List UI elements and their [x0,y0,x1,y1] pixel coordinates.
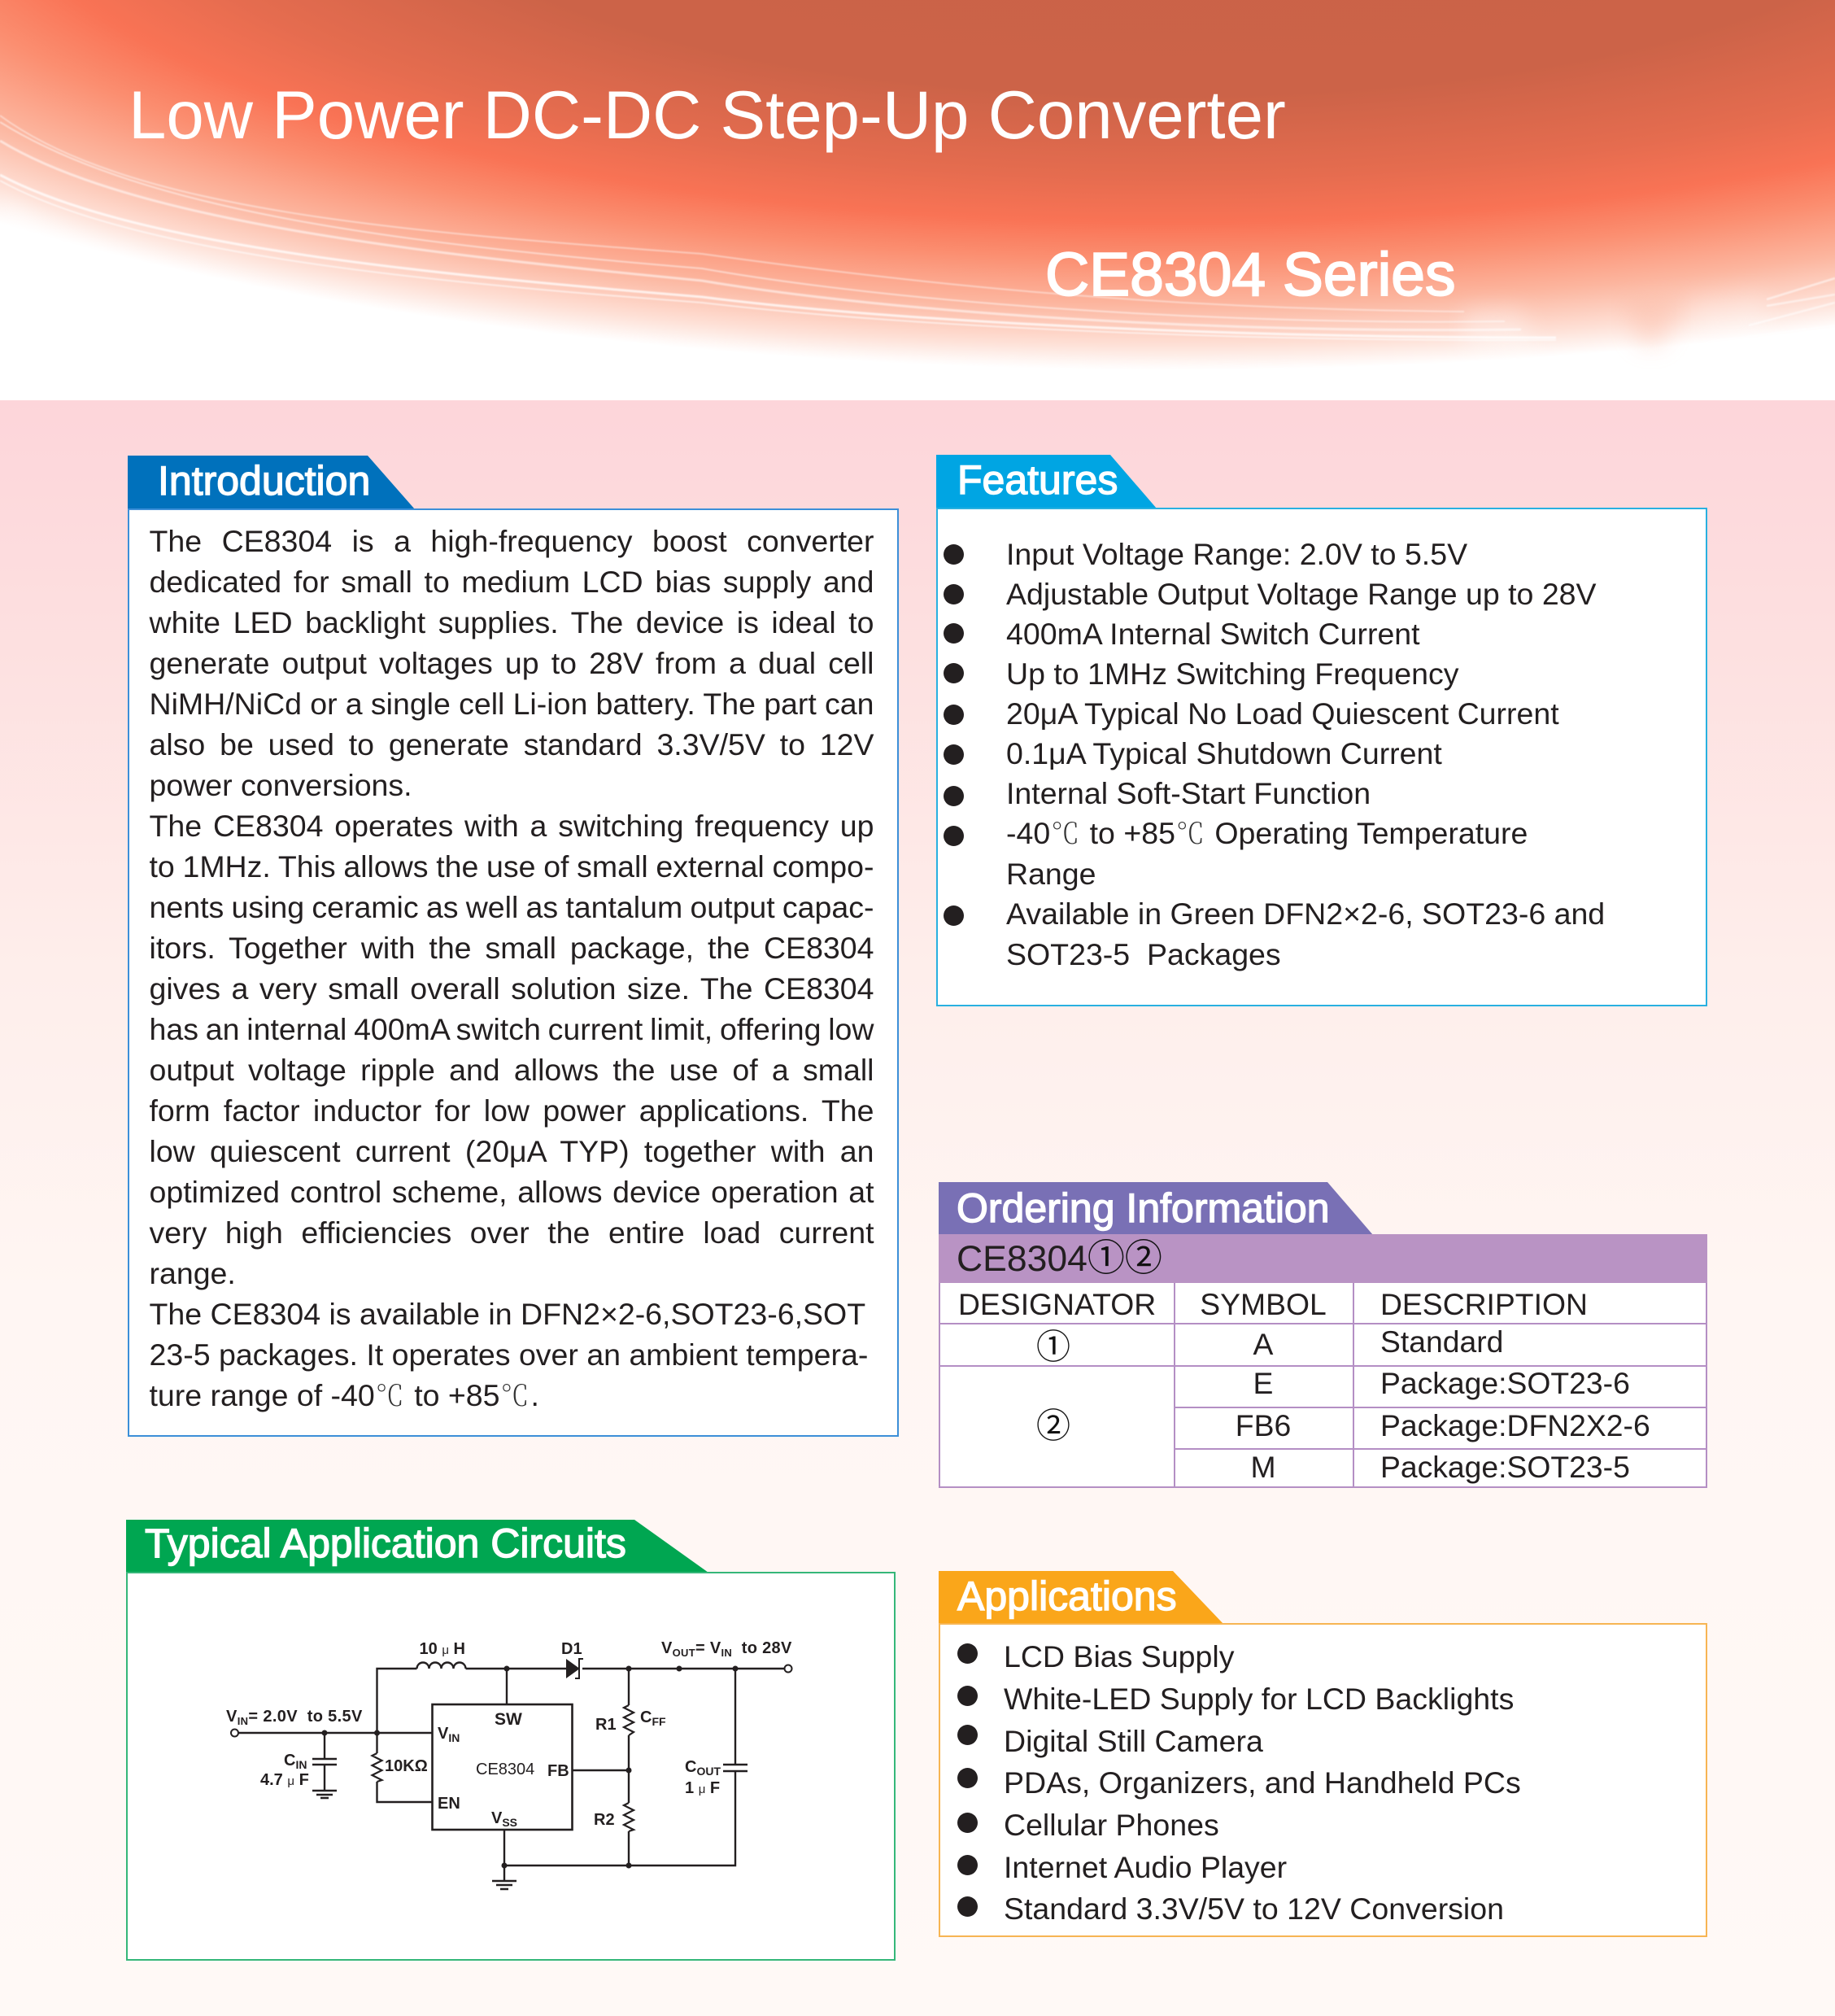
paragraph 2: low quiescent current (20μA TYP) together with an [150,1134,874,1168]
paragraph 2: The CE8304 operates with a switching frequency up [150,809,874,843]
circuit labels: FB [547,1762,569,1780]
circuit labels: V [438,1725,448,1743]
symbol E: E [1253,1366,1273,1400]
description SOT23-6: Package:SOT23-6 [1380,1366,1630,1400]
IC block [433,1704,573,1830]
circuit labels [226,1639,792,1829]
paragraph 3: The CE8304 is available in DFN2×2-6,SOT23-6,SOT [150,1297,865,1331]
circuit labels: R2 [594,1811,615,1829]
application 1: LCD Bias Supply [1004,1639,1234,1673]
panel: applications [939,1571,1707,1937]
panel: ordering information [939,1182,1707,1488]
terminals and junctions [231,1665,792,1868]
panel: typical application circuits [126,1520,896,1961]
description DFN2X2-6: Package:DFN2X2-6 [1380,1408,1650,1442]
application 3: Digital Still Camera [1004,1724,1263,1758]
paragraph 1: power conversions. [150,768,412,802]
paragraph 1: The CE8304 is a high-frequency boost converter [150,524,874,558]
paragraph 3 [150,1297,868,1414]
circuit labels: CE8304 [476,1761,534,1778]
paragraph 1: also be used to generate standard 3.3V/5V to 12V [150,727,874,761]
circuit labels: C [685,1758,696,1776]
paragraph 2: very high efficiencies over the entire load current [150,1215,874,1250]
paragraph 2: to 1MHz. This allows the use of small external compo- [150,849,874,884]
ordering heading tab [939,1182,1373,1235]
circuits heading tab [126,1520,708,1573]
feature 9 [944,897,1605,971]
description standard: Standard [1380,1324,1503,1359]
feature 8: -40℃ to +85℃ Operating Temperature [1006,812,1528,853]
paragraph 1: dedicated for small to medium LCD bias supply and [150,565,874,599]
circuit labels: IN [448,1731,460,1744]
circuit labels: D1 [561,1640,582,1658]
resistors [373,1705,634,1831]
subtitle: series name: CE8304 Series [1045,240,1455,308]
feature 8: Range [1006,856,1096,890]
application 4: PDAs, Organizers, and Handheld PCs [1004,1765,1521,1800]
paragraph 2: output voltage ripple and allows the use of a small [150,1053,874,1087]
feature 3: 400mA Internal Switch Current [1006,617,1420,651]
designator 1: ① [1036,1320,1070,1369]
circuit labels: V [491,1809,502,1827]
paragraph 1: white LED backlight supplies. The device is ideal to [150,605,874,639]
paragraph 2: gives a very small overall solution size. The CE8304 [150,971,874,1006]
circuits heading: Typical Application Circuits [145,1521,626,1566]
ordering heading: Ordering Information [957,1185,1330,1231]
circuit labels: IN [721,1647,732,1659]
circuit labels: C [284,1752,295,1769]
header banner background [0,0,1835,364]
circuit labels: = 2.0V to 5.5V [248,1708,363,1726]
paragraph 3: ture range of -40℃ to +85℃. [150,1373,539,1414]
part number strip: CE8304①② [957,1228,1162,1282]
feature 8 [944,812,1528,890]
column header: designator: DESIGNATOR [958,1287,1156,1321]
inductor [416,1663,465,1669]
introduction heading: Introduction [158,458,370,504]
wires [238,1669,784,1881]
circuit labels: C [640,1708,652,1726]
paragraph 3: 23-5 packages. It operates over an ambient tempera- [150,1337,868,1372]
paragraph 2: has an internal 400mA switch current limit, offering low [150,1012,874,1046]
description SOT23-5: Package:SOT23-5 [1380,1450,1630,1484]
application 7: Standard 3.3V/5V to 12V Conversion [1004,1892,1504,1926]
circuit labels: IN [295,1758,307,1771]
circuit diagram [226,1639,792,1891]
circuit labels: 10KΩ [385,1757,428,1775]
ordering table [939,1283,1707,1488]
applications heading tab [939,1571,1223,1624]
feature 4: Up to 1MHz Switching Frequency [1006,656,1458,690]
circuit box [126,1572,896,1961]
designator 2: ② [1036,1399,1070,1448]
paragraph 1: generate output voltages up to 28V from a dual cell [150,646,874,680]
column header: symbol: SYMBOL [1200,1287,1327,1321]
applications heading: Applications [957,1573,1177,1619]
circuit labels: V [661,1639,673,1657]
feature 6: 0.1μA Typical Shutdown Current [1006,735,1442,770]
circuit labels: 4.7 μ F [260,1771,309,1789]
applications list box [939,1623,1707,1937]
circuit labels: V [226,1708,238,1726]
symbol M: M [1250,1450,1276,1484]
diode [567,1659,583,1678]
circuit labels: IN [238,1715,248,1727]
features heading tab [936,455,1157,508]
column header: description: DESCRIPTION [1380,1287,1588,1321]
circuit labels: to 28V [732,1639,792,1657]
feature 9: SOT23-5 Packages [1006,937,1281,971]
capacitors and grounds [312,1759,748,1889]
paragraph 2: itors. Together with the small package, the CE8304 [150,931,874,965]
symbol FB6: FB6 [1236,1408,1291,1442]
feature 2: Adjustable Output Voltage Range up to 28V [1006,576,1597,610]
application 6: Internet Audio Player [1004,1850,1287,1884]
circuit labels: 10 μ H [420,1640,465,1658]
symbol A: A [1253,1327,1273,1361]
paragraph 1: NiMH/NiCd or a single cell Li-ion battery. The part can [150,687,874,721]
application 5: Cellular Phones [1004,1808,1219,1842]
title: Low Power DC-DC Step-Up Converter [129,76,1286,153]
paragraph 2: range. [150,1256,236,1290]
feature 7: Internal Soft-Start Function [1006,776,1371,810]
feature 5: 20μA Typical No Load Quiescent Current [1006,696,1559,731]
introduction heading tab [128,456,415,509]
paragraph 2 [150,809,874,1290]
circuit labels: OUT [673,1647,695,1659]
circuit labels: = V [695,1639,721,1657]
paragraph 2: form factor inductor for low power applications. The [150,1093,874,1128]
paragraph 1 [150,524,874,802]
circuit labels: FF [652,1715,666,1728]
feature 9: Available in Green DFN2×2-6, SOT23-6 and [1006,897,1605,931]
paragraph 2: optimized control scheme, allows device operation at [150,1175,874,1209]
application 2: White-LED Supply for LCD Backlights [1004,1682,1514,1716]
circuit labels: 1 μ F [685,1779,720,1797]
paragraph 2: nents using ceramic as well as tantalum output capac- [150,890,874,924]
circuit labels: OUT [696,1765,721,1778]
part number strip [939,1234,1707,1283]
circuit labels: R1 [595,1716,617,1734]
circuit labels: SW [495,1710,522,1729]
circuit labels: SS [502,1816,517,1829]
panel: introduction [128,456,899,1437]
features heading: Features [957,457,1118,503]
feature 1: Input Voltage Range: 2.0V to 5.5V [1006,537,1467,571]
panel: features [936,455,1707,1006]
circuit labels: EN [438,1795,460,1813]
introduction text box [128,508,899,1437]
features list box [936,508,1707,1006]
